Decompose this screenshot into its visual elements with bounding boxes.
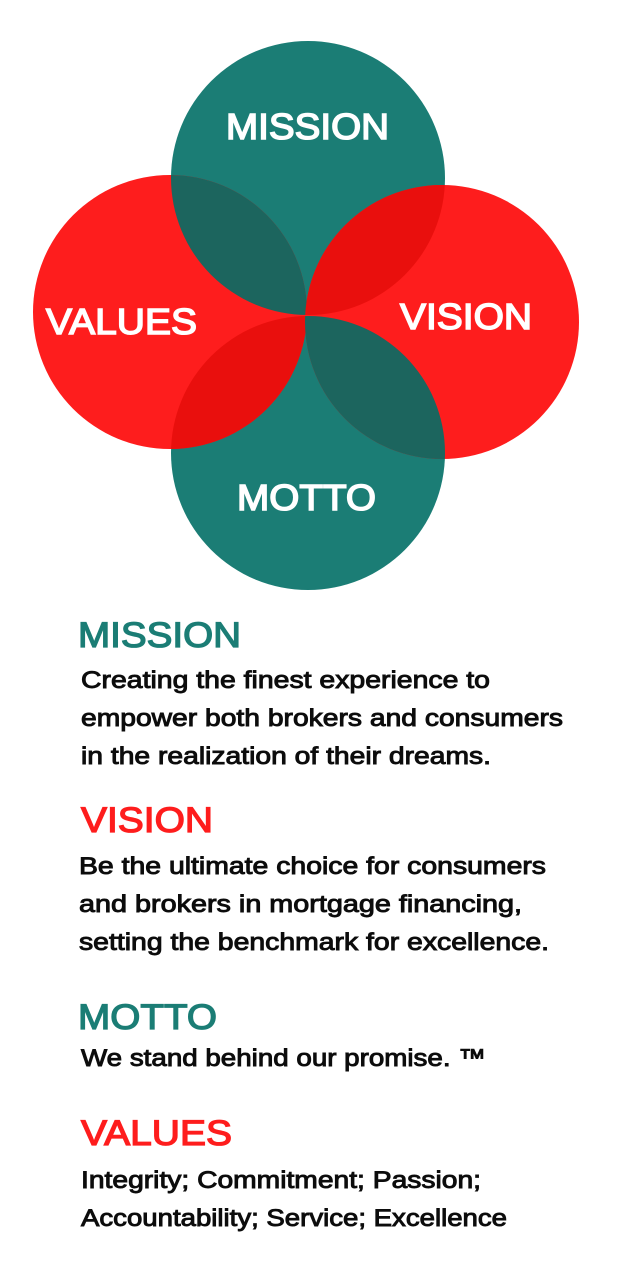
circle: values — [33, 175, 307, 449]
section: values — [81, 1113, 507, 1232]
text: vision statement — [79, 853, 549, 956]
text: mission statement: in the realization of their dreams. — [81, 743, 491, 770]
text: values list — [81, 1167, 507, 1232]
circle: vision — [305, 185, 579, 459]
text: mission statement: Creating the finest experience to — [81, 667, 490, 694]
text: vision statement: and brokers in mortgage financing, — [79, 891, 522, 918]
overlap: motto and vision — [305, 316, 445, 459]
label: values: VALUES — [46, 301, 197, 342]
venn diagram — [33, 41, 579, 590]
text: values list: Accountability; Service; Excellence — [81, 1205, 507, 1232]
section: mission — [78, 615, 563, 770]
text: mission statement: empower both brokers and consumers — [81, 705, 563, 732]
section: motto — [78, 997, 486, 1072]
text: mission statement — [81, 667, 563, 770]
label: mission: MISSION — [226, 106, 389, 147]
heading: vision: VISION — [81, 800, 213, 840]
text: motto statement: We stand behind our promise. ™ — [81, 1045, 486, 1072]
overlap: mission and values — [171, 175, 307, 315]
circle: mission — [171, 41, 445, 315]
label: vision: VISION — [400, 296, 532, 337]
overlap: motto and values — [171, 316, 306, 449]
heading: motto: MOTTO — [78, 997, 217, 1037]
section: vision — [79, 800, 549, 956]
text: vision statement: setting the benchmark for excellence. — [79, 929, 549, 956]
overlap: mission and vision — [305, 185, 445, 315]
heading: mission: MISSION — [78, 615, 241, 655]
heading: values: VALUES — [81, 1113, 232, 1153]
text: vision statement: Be the ultimate choice for consumers — [79, 853, 546, 880]
text: values list: Integrity; Commitment; Passion; — [81, 1167, 481, 1194]
label: motto: MOTTO — [237, 477, 376, 518]
circle: motto — [171, 316, 445, 590]
